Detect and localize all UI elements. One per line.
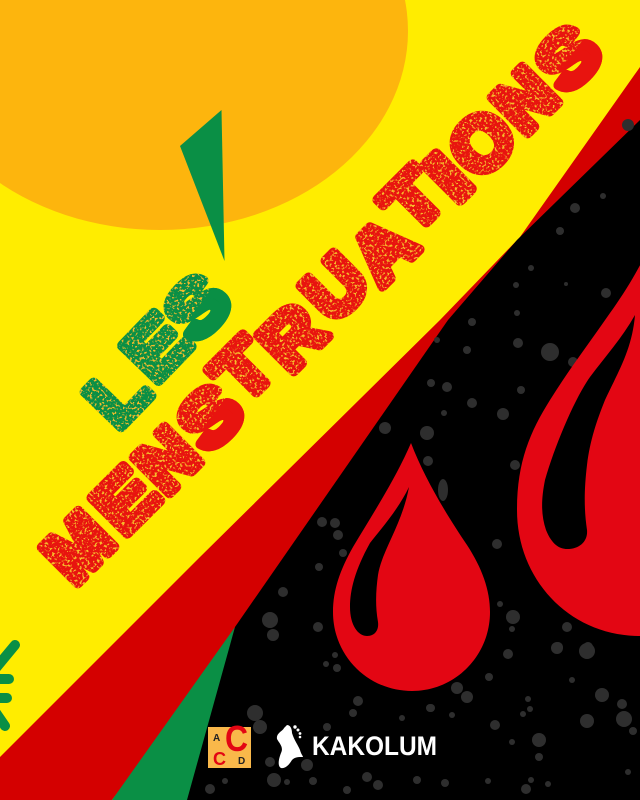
ACCD logo: C	[213, 749, 226, 769]
large blood drop	[517, 235, 640, 636]
title word: MENSTRUATIONS: O	[432, 93, 532, 193]
title word: MENSTRUATIONS: I	[410, 139, 487, 216]
title word: MENSTRUATIONS: S	[519, 9, 617, 107]
title word: MENSTRUATIONS: N	[119, 412, 215, 508]
ink splatter spots	[205, 119, 637, 794]
title word: LES: E	[107, 298, 205, 396]
icon: footprint	[277, 725, 303, 768]
title word: MENSTRUATIONS: E	[77, 452, 174, 549]
green decorative strokes at left edge	[0, 645, 15, 726]
title word: MENSTRUATIONS: T	[196, 323, 290, 417]
title word: MENSTRUATIONS: S	[519, 9, 617, 107]
title word: MENSTRUATIONS	[27, 9, 617, 598]
green wedge	[180, 110, 224, 261]
ACCD logo: D	[238, 756, 245, 767]
orange sun	[0, 0, 408, 230]
ACCD logo: A	[213, 733, 220, 744]
title	[27, 9, 617, 598]
ACCD logo	[208, 718, 251, 769]
title word: MENSTRUATIONS: S	[161, 368, 259, 466]
small drop highlight	[350, 487, 409, 636]
title word: LES: S	[148, 258, 246, 356]
title word: MENSTRUATIONS: U	[286, 238, 385, 337]
wordmark: KAKOLUM	[312, 731, 437, 761]
large drop highlight	[542, 315, 635, 549]
title word: MENSTRUATIONS: R	[243, 288, 342, 387]
black speckled field	[187, 119, 640, 800]
title word: LES	[80, 274, 232, 432]
title word: MENSTRUATIONS: N	[477, 52, 573, 148]
title word: MENSTRUATIONS: T	[366, 153, 460, 247]
title word: MENSTRUATIONS: M	[27, 496, 129, 598]
title word: LES: L	[70, 348, 164, 442]
green bottom triangle	[112, 627, 235, 800]
title word: MENSTRUATIONS: S	[161, 368, 259, 466]
ACCD logo: C	[225, 718, 248, 759]
title word: MENSTRUATIONS: A	[334, 201, 433, 300]
small blood drop	[333, 443, 490, 691]
title word: LES: S	[148, 258, 246, 356]
Kakolum logo	[277, 725, 437, 768]
